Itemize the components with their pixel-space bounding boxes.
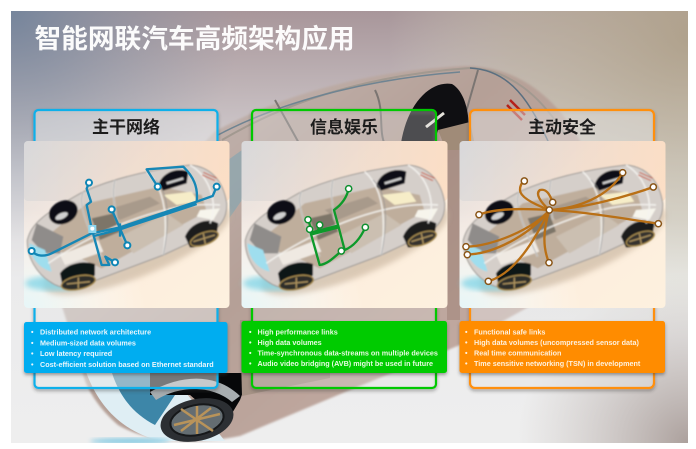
bullet list: infotainment: •: [249, 348, 252, 357]
bullet list: infotainment: Audio video bridging (AVB) might be used in future: [258, 359, 433, 368]
bullet list: active safety: Real time communication: [474, 348, 561, 357]
bullet list: active safety: Time sensitive networking (TSN) in development: [474, 359, 641, 368]
heading: backbone: 主干网络: [92, 117, 160, 137]
network diagram: backbone: [28, 167, 221, 266]
bullet list: backbone: •: [31, 360, 34, 369]
bullet list: active safety: •: [465, 348, 468, 357]
bullet list: active safety: •: [465, 338, 468, 347]
bullet list: active safety: [465, 328, 641, 368]
bullet list: backbone: Low latency required: [40, 349, 112, 358]
bullet list: active safety: Functional safe links: [474, 328, 545, 336]
info box: active safety: [460, 321, 665, 373]
bullet list: backbone: [31, 328, 214, 369]
bullet list: backbone: •: [31, 328, 34, 336]
bullet list: infotainment: High performance links: [258, 328, 338, 336]
bullet list: active safety: •: [465, 328, 468, 336]
image card: active safety: [460, 141, 675, 312]
bullet list: backbone: •: [31, 349, 34, 358]
panel: active safety: [460, 110, 675, 388]
bullet list: backbone: Distributed network architecture: [40, 328, 151, 336]
bullet list: backbone: Cost-efficient solution based on Ethernet standard: [40, 360, 214, 369]
panel: infotainment: [242, 110, 457, 388]
bullet list: infotainment: •: [249, 359, 252, 368]
info box: infotainment: [242, 321, 447, 373]
frame: active safety: [470, 110, 654, 388]
info box: backbone: [24, 322, 228, 373]
bullet list: active safety: •: [465, 359, 468, 368]
bullet list: backbone: •: [31, 338, 34, 347]
panel: backbone network: [24, 110, 239, 388]
network diagram: infotainment: [304, 185, 369, 265]
bullet list: infotainment: •: [249, 338, 252, 347]
image card: infotainment: [242, 141, 457, 312]
network diagram: active safety: [462, 169, 662, 285]
bullet list: infotainment: Time-synchronous data-streams on multiple devices: [258, 348, 438, 357]
bullet list: backbone: Medium-sized data volumes: [40, 338, 136, 347]
bullet list: active safety: High data volumes (uncompressed sensor data): [474, 338, 639, 347]
title: 智能网联汽车高频架构应用: [34, 24, 355, 54]
bullet list: infotainment: •: [249, 328, 252, 336]
frame: backbone: [34, 110, 218, 388]
large background car: [62, 66, 580, 443]
bullet list: infotainment: [249, 328, 438, 368]
heading: active safety: 主动安全: [528, 117, 596, 137]
bullet list: infotainment: High data volumes: [258, 338, 322, 347]
image card: backbone: [24, 141, 239, 312]
frame: infotainment: [252, 110, 436, 388]
heading: infotainment: 信息娱乐: [310, 117, 378, 137]
